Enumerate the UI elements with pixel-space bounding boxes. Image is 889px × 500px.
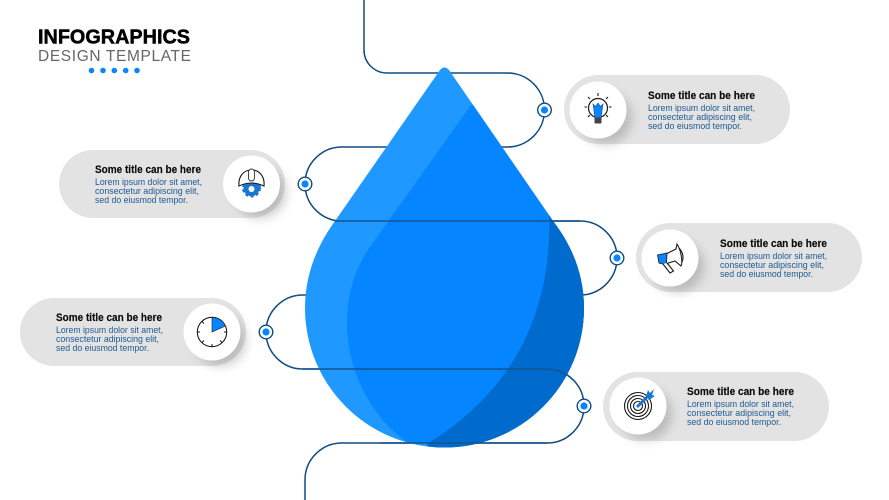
icon: megaphone xyxy=(658,244,683,273)
panel: step 4: consectetur adipiscing elit, xyxy=(56,333,159,344)
title xyxy=(38,26,191,65)
panel: step 2: consectetur adipiscing elit, xyxy=(95,185,199,196)
panel: step 4: Lorem ipsum dolor sit amet, xyxy=(56,324,163,335)
panel: step 2 xyxy=(59,150,286,218)
panel: step 3: Some title can be here xyxy=(720,238,827,250)
title dots xyxy=(89,68,140,73)
panel: step 2: sed do eiusmod tempor. xyxy=(95,194,188,205)
panel: step 1: sed do eiusmod tempor. xyxy=(648,120,742,131)
icon: target xyxy=(624,389,655,420)
panel: step 4: sed do eiusmod tempor. xyxy=(56,342,149,353)
panel: step 1: Lorem ipsum dolor sit amet, xyxy=(648,102,755,113)
icon: helmet and gear xyxy=(239,169,264,196)
panel: step 1 xyxy=(564,75,790,144)
panel: step 3: sed do eiusmod tempor. xyxy=(720,268,813,279)
panel: step 3 xyxy=(636,223,862,292)
water drop xyxy=(305,68,584,448)
panel: step 5: consectetur adipiscing elit, xyxy=(687,407,791,418)
connector nodes xyxy=(259,103,624,413)
panel: step 1: Some title can be here xyxy=(648,90,755,102)
panel: step 2: Some title can be here xyxy=(95,164,201,176)
icon: timer xyxy=(197,317,227,347)
icon: light bulb xyxy=(584,93,612,124)
panel: step 5: Some title can be here xyxy=(687,386,794,398)
connector segments over drop xyxy=(303,221,580,443)
panel: step 3: Lorem ipsum dolor sit amet, xyxy=(720,250,827,261)
panel: step 5: sed do eiusmod tempor. xyxy=(687,416,781,427)
panel: step 1: consectetur adipiscing elit, xyxy=(648,111,752,122)
panel: step 3: consectetur adipiscing elit, xyxy=(720,259,824,270)
title: DESIGN TEMPLATE xyxy=(38,48,191,65)
panel: step 4 xyxy=(20,298,246,366)
connector line xyxy=(266,0,617,500)
panel: step 5: Lorem ipsum dolor sit amet, xyxy=(687,398,794,409)
title: INFOGRAPHICS xyxy=(38,26,190,48)
panel: step 2: Lorem ipsum dolor sit amet, xyxy=(95,176,202,187)
panel: step 4: Some title can be here xyxy=(56,312,162,324)
panel: step 5 xyxy=(603,372,829,441)
